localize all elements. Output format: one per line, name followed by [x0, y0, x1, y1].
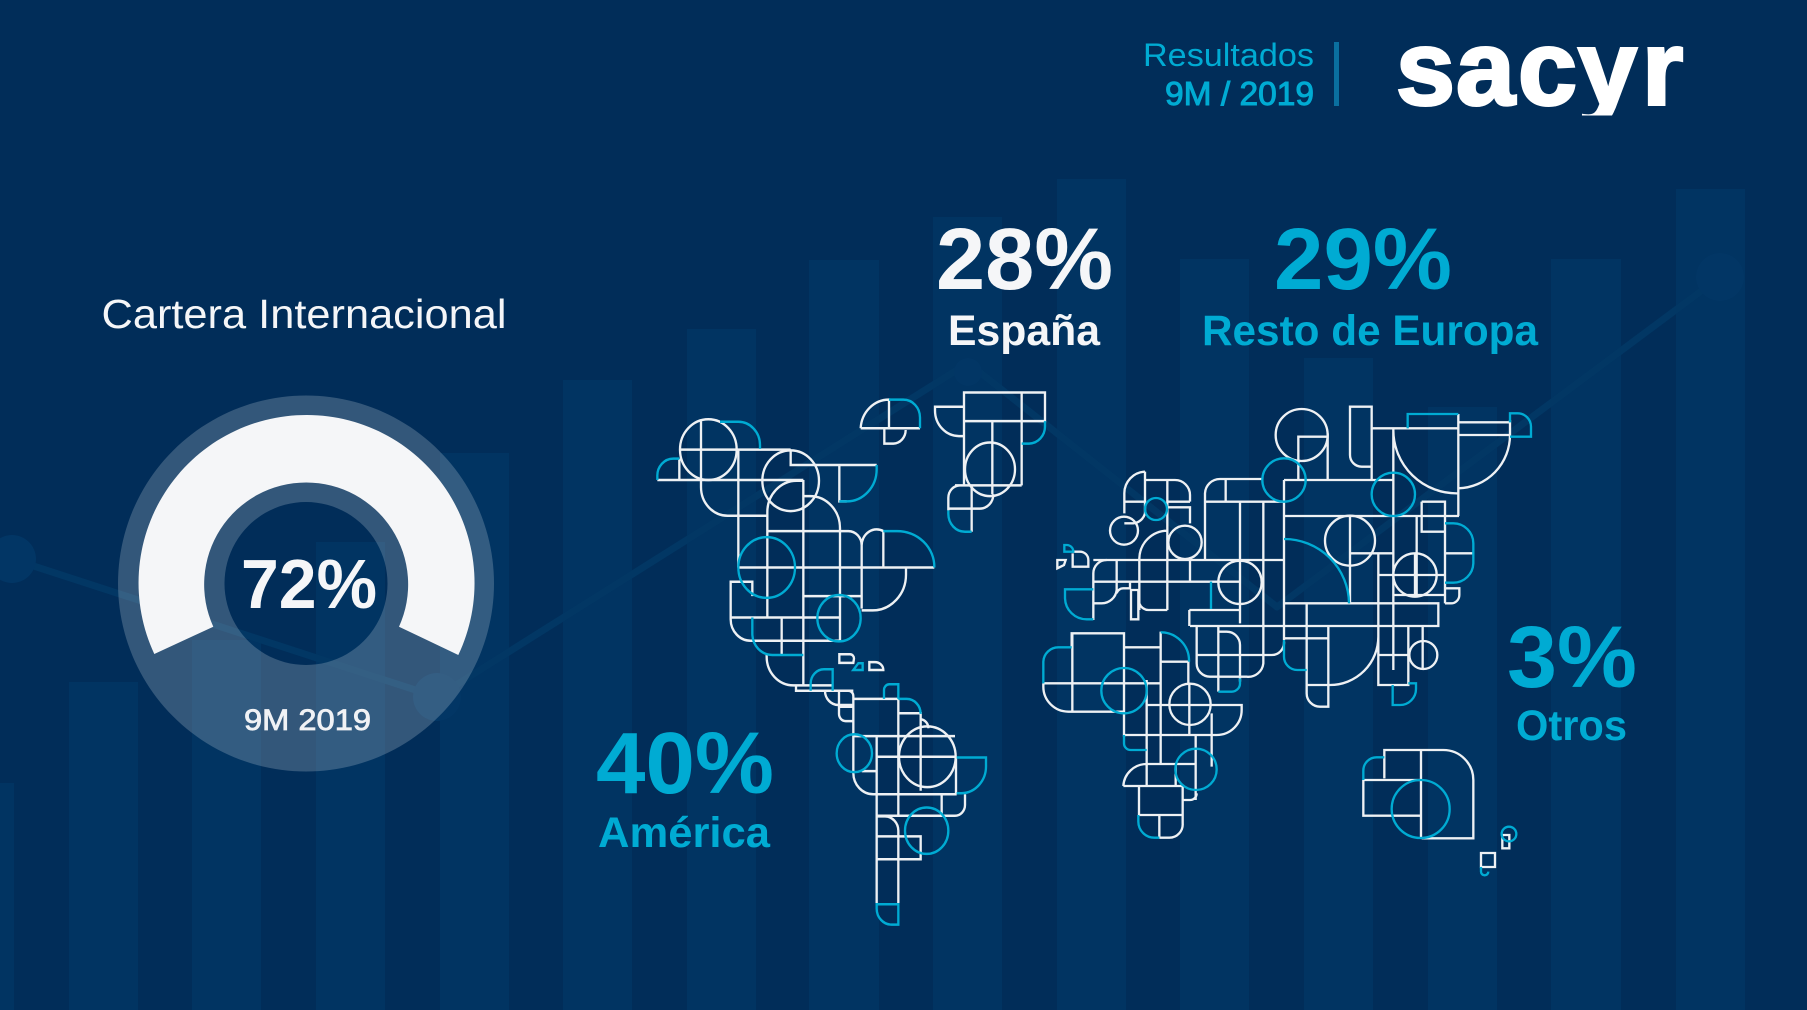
map: Europe, Asia, Africa, Oceania [1043, 407, 1531, 875]
header label: Resultados 9M / 2019: Resultados [1143, 37, 1314, 73]
stat: 40% América: América [598, 809, 771, 857]
gauge period text: 9M 2019 [244, 704, 371, 737]
stat: 28% España: España [948, 307, 1101, 355]
stat: 29% Resto de Europa: 29% [1274, 211, 1452, 308]
stat: 28% España [936, 211, 1113, 355]
gauge value arc [139, 415, 475, 655]
stat: 3% Otros: 3% [1507, 609, 1637, 706]
title: Cartera Internacional: Cartera Internacional [102, 291, 506, 337]
header label: Resultados 9M / 2019 [1143, 37, 1314, 112]
logo: sacyr: sacyr [1396, 10, 1683, 128]
stat: 29% Resto de Europa: Resto de Europa [1202, 307, 1539, 355]
gauge value text: 72% [241, 545, 377, 623]
gauge track ring [118, 396, 494, 772]
stat: 40% América: 40% [596, 715, 774, 812]
header label: Resultados 9M / 2019: 9M / 2019 [1165, 75, 1314, 112]
background line chart [0, 253, 1744, 721]
stat: 28% España: 28% [936, 211, 1113, 308]
gauge: 72% 9M 2019 [118, 396, 494, 772]
background bar chart [0, 179, 1745, 1010]
header divider [1334, 42, 1339, 106]
stat: 3% Otros [1507, 609, 1637, 750]
stat: 40% América [596, 715, 774, 857]
world map [657, 392, 1531, 925]
stat: 29% Resto de Europa [1202, 211, 1539, 355]
stat: 3% Otros: Otros [1516, 702, 1627, 750]
map: the Americas and Greenland [657, 392, 1045, 925]
